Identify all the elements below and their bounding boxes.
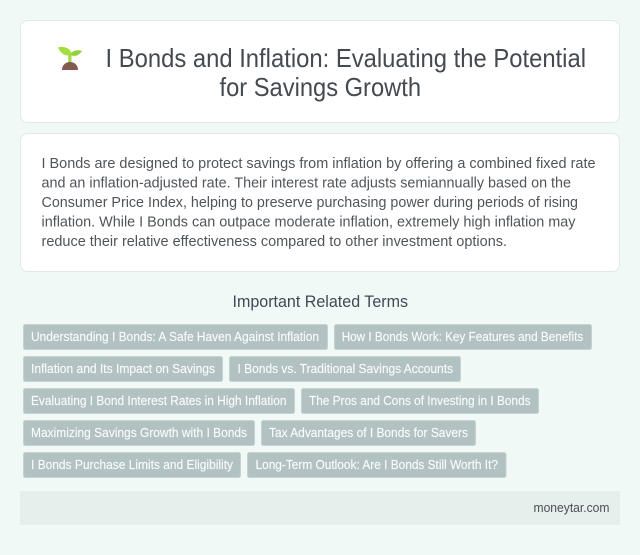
- tag: [24, 356, 222, 382]
- title: for Savings Growth: [220, 72, 421, 102]
- tag: [24, 452, 240, 478]
- panel: description: [20, 134, 620, 272]
- text block: description: inflation. While I Bonds can outpace moderate inflation, extremely high inflation may: [42, 214, 576, 230]
- heading: related terms: Important Related Terms: [232, 293, 408, 311]
- text block: description: [42, 155, 596, 250]
- tag: [24, 420, 254, 446]
- tag: Tax Advantages of I Bonds for Savers: [269, 426, 468, 440]
- tag: I Bonds Purchase Limits and Eligibility: [31, 458, 234, 472]
- tag: I Bonds vs. Traditional Savings Accounts: [238, 362, 453, 376]
- icon: sprout: [58, 47, 82, 70]
- tag: [248, 452, 506, 478]
- tag: The Pros and Cons of Investing in I Bonds: [309, 394, 530, 408]
- title: I Bonds and Inflation: Evaluating the Potential: [106, 43, 586, 73]
- text block: description: Consumer Price Index, helping to preserve purchasing power during periods of rising: [42, 194, 578, 211]
- tag: [230, 356, 460, 382]
- title: [106, 43, 586, 102]
- footer: moneytar.com: [534, 500, 610, 515]
- panel: related term tags: [24, 324, 592, 478]
- tag: [302, 388, 538, 414]
- tag: Understanding I Bonds: A Safe Haven Against Inflation: [31, 330, 319, 344]
- text block: description: and an inflation-adjusted rate. Their interest rate adjusts semiannually based on the: [42, 174, 571, 192]
- tag: Inflation and Its Impact on Savings: [31, 362, 215, 376]
- tag: How I Bonds Work: Key Features and Benefits: [342, 330, 583, 344]
- tag: [24, 388, 294, 414]
- tag: Evaluating I Bond Interest Rates in High Inflation: [31, 394, 287, 408]
- panel: title card: [20, 20, 620, 122]
- tag: [334, 324, 592, 350]
- tag: Long-Term Outlook: Are I Bonds Still Worth It?: [256, 458, 498, 472]
- tag: [24, 324, 328, 350]
- text block: description: reduce their relative effectiveness compared to other investment options.: [42, 233, 507, 250]
- text block: description: I Bonds are designed to protect savings from inflation by offering a combined fixed rate: [42, 155, 596, 172]
- tag: Maximizing Savings Growth with I Bonds: [31, 426, 247, 440]
- tag: [262, 420, 476, 446]
- footer: [20, 491, 620, 525]
